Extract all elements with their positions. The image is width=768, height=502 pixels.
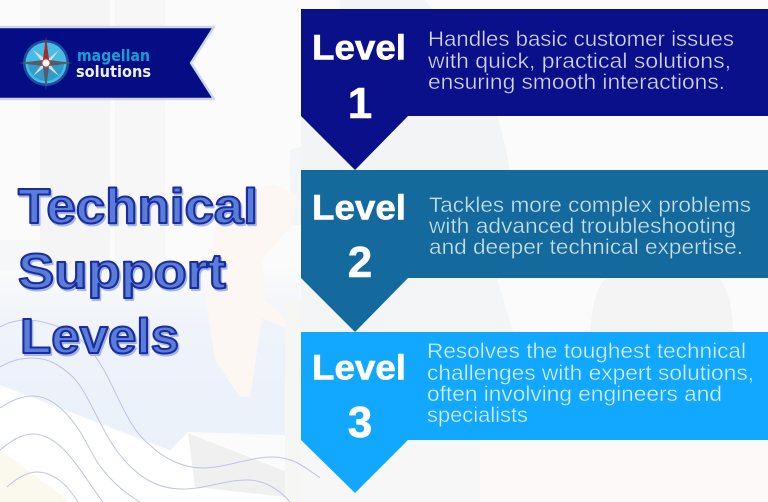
title (18, 180, 260, 366)
title: Support (20, 247, 228, 301)
level 1 label (312, 28, 406, 128)
level 3 description: often involving engineers and (427, 383, 722, 406)
level 3 label (312, 348, 406, 447)
level 2 description: Tackles more complex problems (429, 194, 751, 217)
logo wordmark: solutions (76, 62, 151, 81)
level 1 label: Level (312, 28, 406, 68)
level 1 description (427, 28, 734, 94)
level 3 description (427, 340, 754, 427)
level 1 description: Handles basic customer issues (428, 28, 734, 51)
title: Technical (18, 180, 258, 234)
level 2 label: 2 (348, 238, 372, 287)
title: Support (18, 245, 226, 299)
logo wordmark (76, 46, 151, 81)
level 1 description: ensuring smooth interactions. (428, 71, 725, 94)
level 2 description (428, 194, 751, 259)
level 2 label: Level (312, 188, 406, 228)
level 3 label: Level (312, 348, 406, 388)
level 2 description: and deeper technical expertise. (429, 236, 743, 259)
title: Technical (20, 182, 260, 236)
level 3 label: 3 (348, 398, 372, 447)
panel: level 3 (301, 332, 768, 493)
logo wordmark: magellan (77, 46, 150, 65)
level 3 description: Resolves the toughest technical (427, 340, 746, 363)
level 3 description: specialists (427, 404, 528, 427)
title: Levels (22, 312, 180, 366)
level 3 description: challenges with expert solutions, (427, 362, 754, 385)
panel: level 1 (301, 9, 768, 170)
level 1 description: with quick, practical solutions, (427, 50, 731, 73)
panel: level 2 (301, 170, 768, 332)
level 1 label: 1 (348, 79, 372, 128)
title: Levels (20, 310, 179, 364)
icon: compass (19, 37, 73, 90)
level 2 description: with advanced troubleshooting (428, 215, 736, 238)
level 2 label (312, 188, 406, 287)
logo banner (0, 27, 214, 99)
